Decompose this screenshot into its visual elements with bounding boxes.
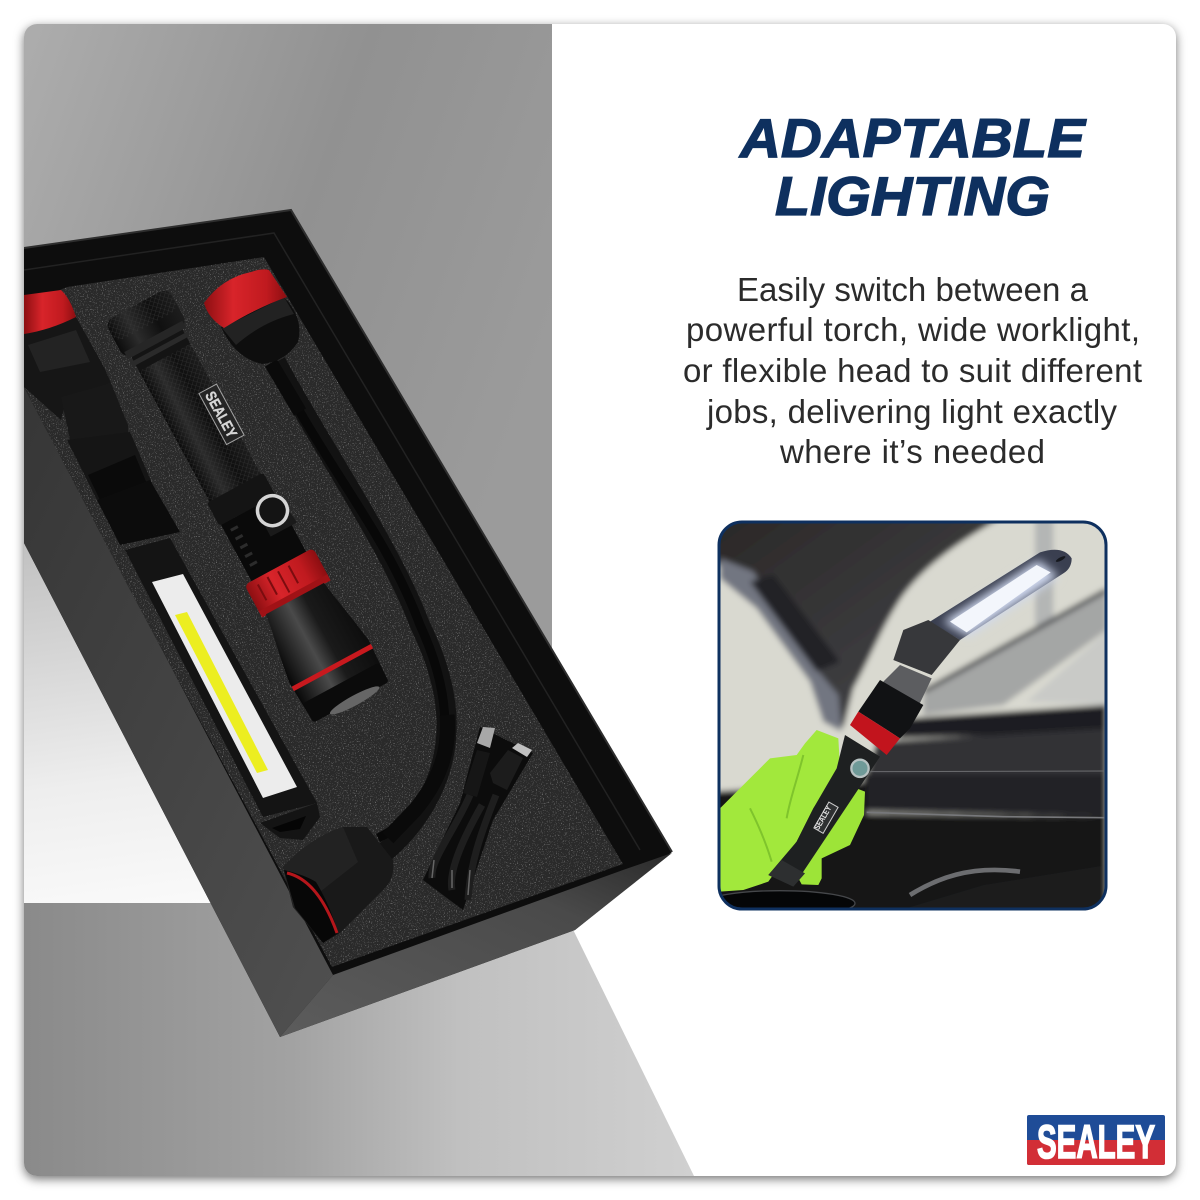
description text: Easily switch between a	[737, 271, 1089, 308]
title: ADAPTABLE	[738, 107, 1087, 169]
torch switch	[851, 760, 869, 777]
title: LIGHTING	[775, 165, 1050, 227]
flashlight	[97, 283, 393, 728]
title	[738, 107, 1087, 227]
brand plate on flashlight: SEALEY	[201, 389, 240, 441]
power button	[256, 494, 290, 528]
description text: jobs, delivering light exactly	[706, 393, 1118, 430]
worklight arm	[883, 550, 1072, 710]
product: open gift box with worklight kit	[24, 210, 672, 1037]
description text: powerful torch, wide worklight,	[686, 311, 1140, 348]
photo: worklight in use under car bonnet	[705, 515, 1115, 916]
blurred garage background	[710, 515, 1115, 915]
box shell	[24, 210, 672, 1037]
foam insert	[24, 257, 623, 967]
description text	[683, 271, 1142, 470]
worklight head, hinge and lamp bar	[24, 290, 320, 840]
panel: grey product backdrop	[24, 24, 694, 1176]
foam recess shadows	[276, 362, 533, 910]
USB charging cable	[432, 727, 532, 900]
description text: where it’s needed	[779, 433, 1045, 470]
description text: or flexible head to suit different	[683, 352, 1142, 389]
side grip slots	[230, 525, 258, 567]
gooseneck flexible light	[204, 269, 448, 943]
torch brand plate: SEALEY	[812, 804, 834, 831]
green glove	[720, 730, 865, 892]
torch body	[768, 680, 923, 887]
